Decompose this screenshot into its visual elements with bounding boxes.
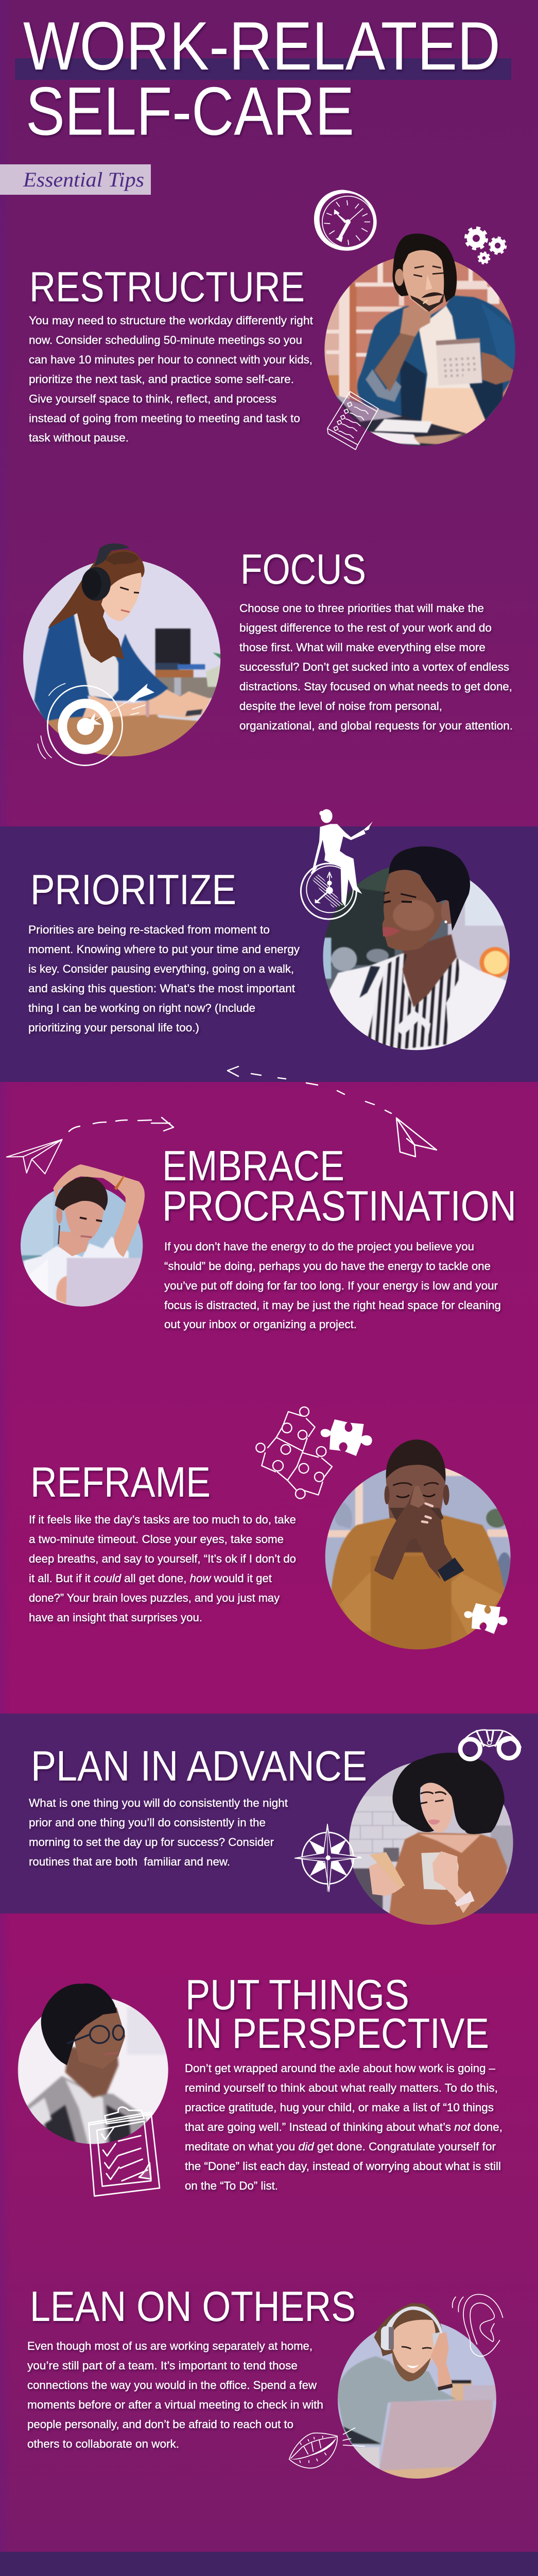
text block: focus xyxy=(239,602,513,732)
text block: focus: biggest difference to the rest of your work and do xyxy=(239,621,492,634)
title band xyxy=(15,58,511,80)
subtitle tab: essential tips xyxy=(0,164,151,195)
photo: woman with headphones xyxy=(22,544,221,759)
text block: embrace procrastination: out your inbox or organizing a project. xyxy=(164,1318,357,1331)
text block: reframe: deep breaths, and say to yourself, “It’s ok if I don’t do xyxy=(29,1552,296,1565)
text block: restructure: instead of going from meeting to meeting and task to xyxy=(29,412,300,425)
heading: embrace procrastination: EMBRACE xyxy=(162,1142,344,1190)
icon: ear xyxy=(453,2294,503,2357)
text block: prioritize: Priorities are being re-stacked from moment to xyxy=(28,923,270,936)
text block: restructure xyxy=(29,314,314,444)
panel: let go band xyxy=(0,2552,538,2576)
heading: restructure: RESTRUCTURE xyxy=(29,263,305,311)
text block: reframe: have an insight that surprises you. xyxy=(29,1611,202,1624)
text block: embrace procrastination: focus is distracted, it may be just the right head space for cleaning xyxy=(164,1299,501,1312)
text block: reframe: a two-minute timeout. Close your eyes, take some xyxy=(29,1533,284,1546)
text block: embrace procrastination xyxy=(164,1240,501,1331)
panel: prioritize band xyxy=(0,826,538,1082)
icon: outlined puzzle pieces xyxy=(256,1407,332,1499)
text block: focus: despite the level of noise from personal, xyxy=(239,700,442,713)
text block: put things in perspective: remind yourself to think about what really matters. To do this, xyxy=(185,2081,498,2094)
text block: put things in perspective: on the “To Do” list. xyxy=(185,2179,278,2192)
text block: plan in advance: prior and one thing you’ll do consistently in the xyxy=(29,1816,266,1829)
icon: solid puzzle piece over photo xyxy=(464,1603,507,1634)
text block: plan in advance xyxy=(29,1797,288,1868)
heading: prioritize: PRIORITIZE xyxy=(30,866,236,913)
icon: gears xyxy=(466,228,506,263)
text block: lean on others: Even though most of us are working separately at home, xyxy=(27,2340,313,2352)
text block: reframe: it all. But if it could all get done, how would it get xyxy=(29,1572,272,1585)
text block: restructure: can have 10 minutes per hour to connect with your kids, xyxy=(29,353,313,366)
icon: businesswoman sitting on clock xyxy=(301,809,373,919)
text block: lean on others: people personally, and don’t be afraid to reach out to xyxy=(27,2418,293,2431)
text block: put things in perspective: meditate on what you did get done. Congratulate yourself for xyxy=(185,2140,496,2153)
text block: put things in perspective: practice gratitude, hug your child, or make a list of “10 things xyxy=(185,2101,494,2114)
heading: put things in perspective xyxy=(185,1971,489,2057)
text block: embrace procrastination: you’ve put off doing for far too long. If your energy is low and your xyxy=(164,1279,498,1292)
panel: plan in advance band xyxy=(0,1714,538,1913)
heading: put things in perspective: IN PERSPECTIVE xyxy=(185,2009,489,2057)
text block: restructure: prioritize the next task, and practice some self-care. xyxy=(29,373,294,385)
text block: prioritize: moment. Knowing where to put your time and energy xyxy=(28,943,300,956)
photo: man with headphones and laptop xyxy=(336,2303,498,2480)
text block: prioritize: prioritizing your personal life too.) xyxy=(28,1021,199,1034)
text block: plan in advance: routines that are both familiar and new. xyxy=(29,1855,230,1868)
arrow: dashed flight path to right paper plane xyxy=(228,1066,391,1113)
text block: prioritize: and asking this question: What’s the most important xyxy=(28,982,296,995)
photo: woman stretching at laptop xyxy=(19,1164,146,1309)
text block: embrace procrastination: “should” be doing, perhaps you do have the energy to tackle one xyxy=(164,1260,491,1273)
text block: plan in advance: What is one thing you will do consistently the night xyxy=(29,1797,288,1809)
text block: lean on others: moments before or after a virtual meeting to check in with xyxy=(27,2398,323,2411)
subtitle tab: essential tips: Essential Tips xyxy=(23,168,144,191)
text block: focus: organizational, and global requests for your attention. xyxy=(239,719,513,732)
heading: reframe: REFRAME xyxy=(30,1458,211,1506)
text block: focus: those first. What will make everything else more xyxy=(239,641,485,654)
text block: lean on others: connections the way you would in the office. Spend a few xyxy=(27,2379,317,2392)
text block: plan in advance: morning to set the day up for success? Consider xyxy=(29,1836,274,1849)
text block: put things in perspective xyxy=(185,2062,502,2192)
text block: put things in perspective: Don’t get wrapped around the axle about how work is going – xyxy=(185,2062,495,2075)
icon: right paper plane xyxy=(396,1118,437,1157)
heading: lean on others: LEAN ON OTHERS xyxy=(30,2282,356,2330)
photo: woman in striped blouse xyxy=(323,846,513,1061)
text block: reframe: If it feels like the day’s tasks are too much to do, take xyxy=(29,1513,296,1526)
text block: restructure: task without pause. xyxy=(29,431,129,444)
title: SELF-CARE xyxy=(26,73,354,149)
icon: solid puzzle piece xyxy=(321,1419,372,1456)
photo: man with hands on face xyxy=(324,1439,512,1650)
heading: plan in advance: PLAN IN ADVANCE xyxy=(31,1742,367,1790)
text block: reframe xyxy=(29,1513,296,1624)
text block: lean on others: others to collaborate on work. xyxy=(27,2437,179,2450)
text block: prioritize: is key. Consider pausing everything, going on a walk, xyxy=(28,962,294,975)
heading: put things in perspective: PUT THINGS xyxy=(185,1971,409,2019)
text block: put things in perspective: the “Done” list each day, instead of worrying about what is still xyxy=(185,2160,501,2173)
icon: compass rose xyxy=(295,1824,361,1892)
text block: lean on others: you’re still part of a team. It’s important to tend those xyxy=(27,2359,298,2372)
icon: clipboard checklist xyxy=(89,2107,160,2196)
title xyxy=(23,8,500,149)
photo: man with calendar xyxy=(323,233,518,450)
text block: reframe: done?” Your brain loves puzzles, and you just may xyxy=(29,1591,280,1604)
heading: embrace procrastination xyxy=(162,1142,516,1230)
text block: put things in perspective: that are going well.” Instead of thinking about what’s not done, xyxy=(185,2121,502,2133)
arrow: dashed flight path from left paper plane xyxy=(69,1117,173,1131)
heading: focus: FOCUS xyxy=(240,545,366,593)
photo: woman with phone and mug xyxy=(349,1753,515,1928)
text block: lean on others xyxy=(27,2340,323,2450)
icon: left paper plane xyxy=(7,1140,62,1174)
text block: focus: Choose one to three priorities that will make the xyxy=(239,602,484,615)
icon: clock xyxy=(314,190,377,251)
text block: prioritize xyxy=(28,923,300,1034)
icon: talking lips xyxy=(289,2428,365,2468)
text block: restructure: now. Consider scheduling 50-minute meetings so you xyxy=(29,334,302,346)
photo: woman with glasses xyxy=(17,1984,170,2148)
text block: focus: distractions. Stay focused on what needs to get done, xyxy=(239,680,512,693)
text block: restructure: Give yourself space to think, reflect, and process xyxy=(29,393,276,405)
icon: checklist notepad xyxy=(327,392,378,450)
text block: focus: successful? Don’t get sucked into a vortex of endless xyxy=(239,660,509,673)
text block: embrace procrastination: If you don’t have the energy to do the project you believe you xyxy=(164,1240,474,1253)
icon: target with arrow xyxy=(38,684,154,766)
text block: restructure: You may need to structure the workday differently right xyxy=(29,314,314,327)
icon: binoculars xyxy=(460,1730,521,1759)
text block: prioritize: thing I can be working on right now? (Include xyxy=(28,1002,255,1014)
